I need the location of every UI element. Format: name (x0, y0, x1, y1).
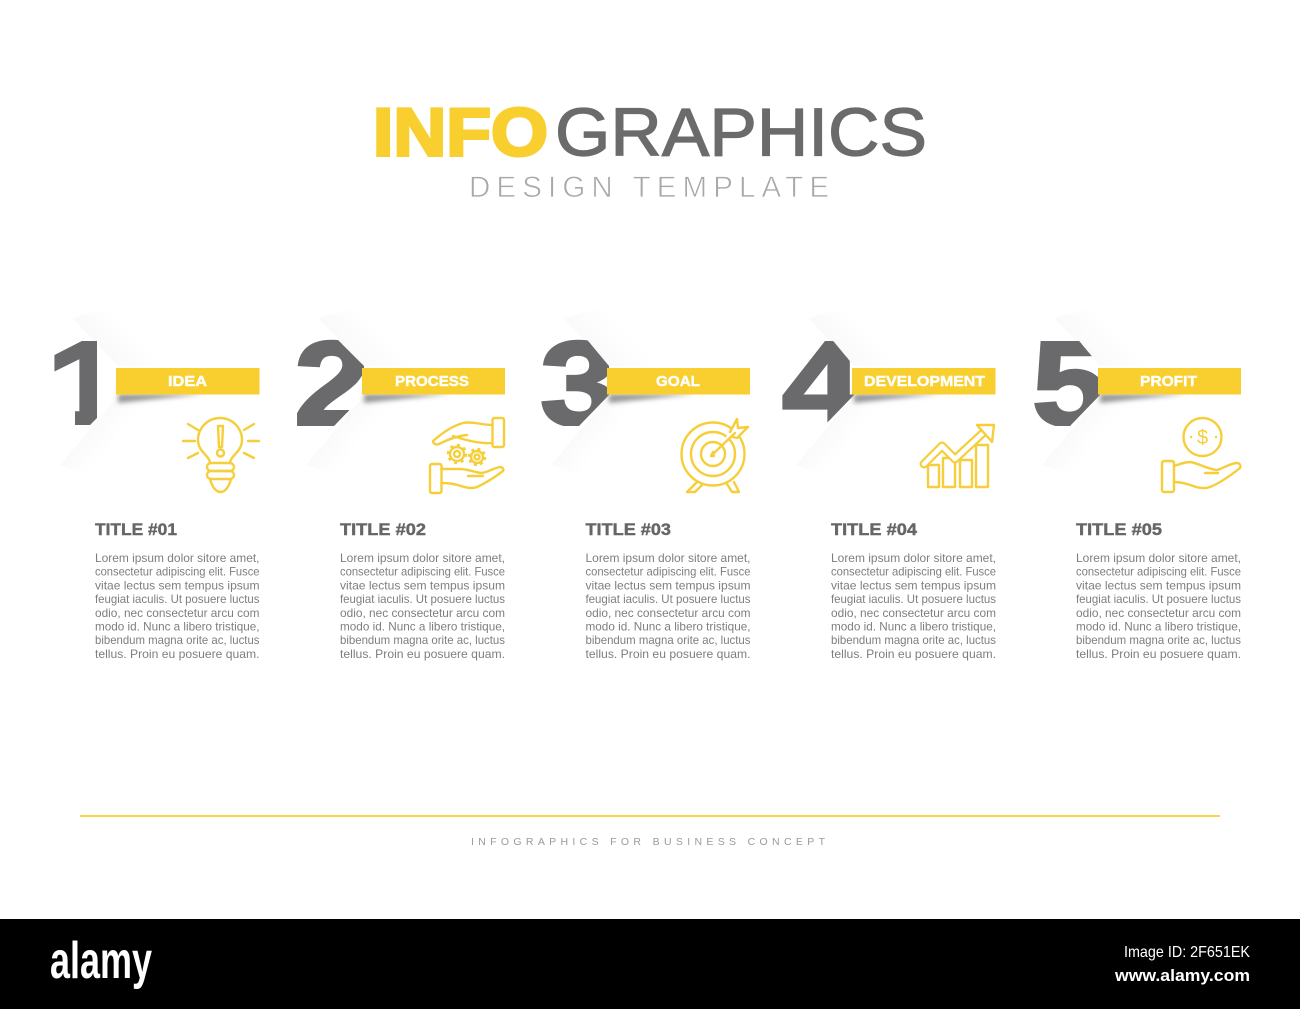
text block: step 4 (831, 551, 996, 661)
text block: step 1: tellus. Proin eu posuere quam. (95, 647, 260, 661)
title: INFO (373, 94, 548, 170)
panel: step 2 process (297, 340, 506, 660)
text block: step 2: vitae lectus sem tempus ipsum (340, 578, 505, 592)
bar shadow (609, 394, 696, 403)
text block: step 1 (95, 551, 260, 661)
text block: step 4: modo id. Nunc a libero tristique, (831, 620, 996, 634)
text block: step 2: consectetur adipiscing elit. Fusce (340, 565, 505, 579)
title (373, 94, 927, 170)
title: GRAPHICS (555, 94, 927, 170)
heading: title 05: TITLE #05 (1076, 521, 1162, 539)
number 1: 1 (46, 317, 130, 451)
text block: step 4: consectetur adipiscing elit. Fusce (831, 565, 996, 579)
text block: step 3: Lorem ipsum dolor sitore amet, (586, 551, 750, 565)
number 5: 5 (1032, 317, 1108, 451)
label bar: idea: IDEA (168, 373, 207, 390)
text block: step 5: modo id. Nunc a libero tristique, (1076, 620, 1241, 634)
icon: hands with gears (430, 418, 504, 493)
text block: step 2: bibendum magna orite ac, luctus (340, 633, 505, 647)
text block: step 3 (586, 551, 751, 661)
text block: step 1: Lorem ipsum dolor sitore amet, (95, 551, 260, 565)
text block: step 1: consectetur adipiscing elit. Fusce (95, 565, 260, 579)
panel: step 1 idea (54, 341, 260, 660)
panel: step 5 profit (1034, 341, 1242, 660)
icon: hand with coin: $ (1197, 427, 1208, 449)
text block: step 4: tellus. Proin eu posuere quam. (831, 647, 996, 661)
number 4: 4 (782, 317, 862, 451)
text block: step 4: Lorem ipsum dolor sitore amet, (831, 551, 996, 565)
image id: Image ID: 2F651EK (1124, 944, 1250, 961)
number 3: 3 (540, 317, 618, 451)
text block: step 4: feugiat iaculis. Ut posuere luctus (831, 592, 996, 606)
icon: light bulb (183, 418, 259, 492)
panel: step 4 development (782, 341, 996, 660)
heading: title 02: TITLE #02 (340, 521, 426, 539)
label bar: development (852, 368, 996, 394)
label bar: goal (607, 368, 750, 394)
text block: step 5: bibendum magna orite ac, luctus (1076, 633, 1241, 647)
text block: step 4: vitae lectus sem tempus ipsum (831, 578, 996, 592)
label bar: idea (116, 368, 260, 394)
number 2: 2 (294, 317, 370, 451)
text block: step 3: feugiat iaculis. Ut posuere luctus (586, 592, 750, 606)
label bar: development: DEVELOPMENT (864, 373, 985, 390)
alamy logo: alamy (50, 932, 152, 990)
text block: step 5: odio, nec consectetur arcu com (1076, 606, 1241, 620)
label bar: profit: PROFIT (1140, 373, 1197, 390)
text block: step 2 (340, 551, 505, 661)
label bar: process: PROCESS (395, 373, 469, 390)
text block: step 5: tellus. Proin eu posuere quam. (1076, 647, 1241, 661)
label bar: goal: GOAL (656, 373, 700, 390)
heading: title 04: TITLE #04 (831, 521, 918, 539)
text block: step 3: bibendum magna orite ac, luctus (586, 633, 750, 647)
text block: step 1: vitae lectus sem tempus ipsum (95, 578, 260, 592)
icon: growth chart (924, 425, 994, 487)
text block: step 2: odio, nec consectetur arcu com (340, 606, 505, 620)
website: www.alamy.com (1114, 966, 1250, 985)
bar shadow (854, 394, 941, 403)
bar shadow (1100, 394, 1187, 403)
text block: step 3: consectetur adipiscing elit. Fusce (586, 565, 751, 579)
label bar: process (362, 368, 505, 394)
text block: step 5: feugiat iaculis. Ut posuere luctus (1076, 592, 1241, 606)
bar shadow (364, 394, 451, 403)
text block: step 3: tellus. Proin eu posuere quam. (586, 647, 750, 661)
text block: step 1: feugiat iaculis. Ut posuere luctus (95, 592, 260, 606)
subtitle: DESIGN TEMPLATE (469, 171, 829, 204)
footer caption: INFOGRAPHICS FOR BUSINESS CONCEPT (471, 836, 826, 848)
text block: step 4: odio, nec consectetur arcu com (831, 606, 996, 620)
panel: step 3 goal (541, 340, 750, 660)
watermark band (0, 919, 1300, 1009)
text block: step 5: consectetur adipiscing elit. Fusce (1076, 565, 1241, 579)
heading: title 03: TITLE #03 (586, 521, 671, 539)
text block: step 2: Lorem ipsum dolor sitore amet, (340, 551, 505, 565)
icon: target with arrow (682, 419, 748, 492)
text block: step 2: tellus. Proin eu posuere quam. (340, 647, 505, 661)
bar shadow (118, 394, 205, 403)
text block: step 4: bibendum magna orite ac, luctus (831, 633, 996, 647)
text block: step 5 (1076, 551, 1241, 661)
heading: title 01: TITLE #01 (95, 521, 177, 539)
label bar: profit (1098, 368, 1241, 394)
text block: step 3: modo id. Nunc a libero tristique, (586, 620, 750, 634)
icon: hand with coin (1162, 418, 1240, 492)
text block: step 2: modo id. Nunc a libero tristique, (340, 620, 505, 634)
text block: step 2: feugiat iaculis. Ut posuere luctus (340, 592, 505, 606)
text block: step 5: vitae lectus sem tempus ipsum (1076, 578, 1241, 592)
text block: step 5: Lorem ipsum dolor sitore amet, (1076, 551, 1241, 565)
text block: step 1: modo id. Nunc a libero tristique, (95, 620, 260, 634)
text block: step 3: odio, nec consectetur arcu com (586, 606, 750, 620)
text block: step 1: bibendum magna orite ac, luctus (95, 633, 260, 647)
text block: step 1: odio, nec consectetur arcu com (95, 606, 260, 620)
text block: step 3: vitae lectus sem tempus ipsum (586, 578, 751, 592)
